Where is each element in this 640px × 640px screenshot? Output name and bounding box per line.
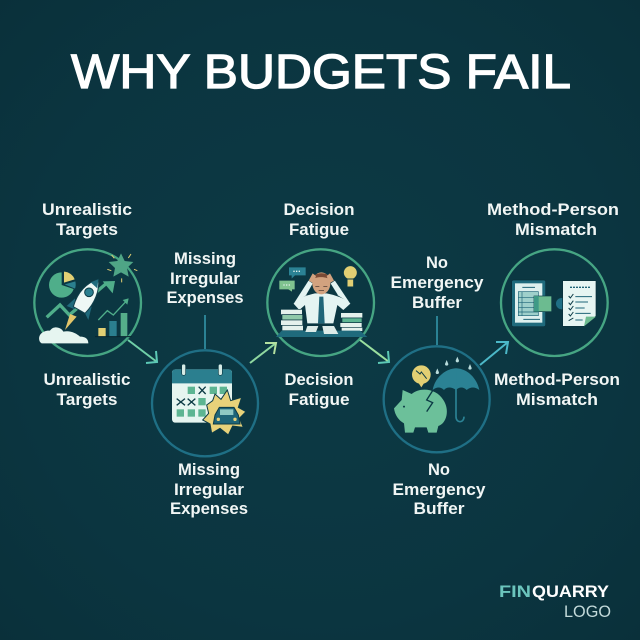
step 4 bottom label: No Emergency Buffer: Buffer [414, 499, 465, 518]
step 2 bottom label: Missing Irregular Expenses: Expenses [170, 499, 248, 518]
step 4 top label: No Emergency Buffer [390, 253, 484, 312]
step 1 bottom label: Unrealistic Targets: Targets [56, 390, 118, 409]
step 3 icon: stressed person at desk [267, 249, 374, 356]
step 2 top label: Missing Irregular Expenses [166, 249, 244, 307]
step 1 top label: Unrealistic Targets [42, 200, 132, 239]
step 5 bottom label: Method-Person Mismatch: Mismatch [516, 390, 598, 409]
step 3 top label: Decision Fatigue: Decision [284, 200, 354, 219]
step 5 top label: Method-Person Mismatch [487, 200, 619, 239]
step 4 top label: No Emergency Buffer: Buffer [412, 293, 462, 312]
step 2 top label: Missing Irregular Expenses: Missing [174, 249, 236, 268]
step 4 icon: broken piggy bank and umbrella [384, 346, 490, 452]
step 1 top label: Unrealistic Targets: Unrealistic [42, 200, 132, 219]
connector: step 4 label to circle [436, 316, 438, 345]
arrow: step 1 to step 2 [128, 340, 157, 363]
step 4 bottom label: No Emergency Buffer [392, 460, 486, 518]
step 2 bottom label: Missing Irregular Expenses [170, 460, 248, 518]
step 3 bottom label: Decision Fatigue [284, 370, 354, 409]
step 3 top label: Decision Fatigue: Fatigue [289, 220, 349, 239]
step 5 top label: Method-Person Mismatch: Mismatch [515, 220, 597, 239]
step 2 bottom label: Missing Irregular Expenses: Missing [178, 460, 240, 479]
step 5 icon: spreadsheet and checklist [501, 249, 608, 356]
step 4 top label: No Emergency Buffer: Emergency [390, 273, 484, 292]
step 5 top label: Method-Person Mismatch: Method-Person [487, 200, 619, 219]
step 2 top label: Missing Irregular Expenses: Irregular [170, 269, 240, 288]
connector: step 2 label to circle [204, 315, 206, 349]
step 3 top label: Decision Fatigue [284, 200, 354, 239]
step 5 bottom label: Method-Person Mismatch: Method-Person [494, 370, 620, 389]
arrow: step 2 to step 3 [250, 343, 276, 363]
title: WHY BUDGETS FAIL [71, 46, 571, 99]
logo [499, 582, 611, 621]
logo: FIN [499, 582, 531, 601]
step 1 icon: rocket, charts and star [34, 249, 141, 356]
step 5 bottom label: Method-Person Mismatch [494, 370, 620, 409]
step 2 icon: calendar and car [152, 350, 258, 456]
step 1 bottom label: Unrealistic Targets [44, 370, 130, 409]
step 4 bottom label: No Emergency Buffer: No [428, 460, 450, 479]
step 3 bottom label: Decision Fatigue: Decision [284, 370, 354, 389]
arrow: step 3 to step 4 [360, 340, 389, 363]
logo: QUARRY [532, 582, 610, 601]
step 4 top label: No Emergency Buffer: No [426, 253, 448, 272]
logo: LOGO [564, 602, 611, 621]
step 4 bottom label: No Emergency Buffer: Emergency [392, 480, 486, 499]
step 2 top label: Missing Irregular Expenses: Expenses [166, 288, 244, 307]
step 1 top label: Unrealistic Targets: Targets [56, 220, 118, 239]
arrow: step 4 to step 5 [480, 342, 508, 365]
step 2 bottom label: Missing Irregular Expenses: Irregular [174, 480, 244, 499]
step 3 bottom label: Decision Fatigue: Fatigue [288, 390, 350, 409]
step 1 bottom label: Unrealistic Targets: Unrealistic [44, 370, 130, 389]
